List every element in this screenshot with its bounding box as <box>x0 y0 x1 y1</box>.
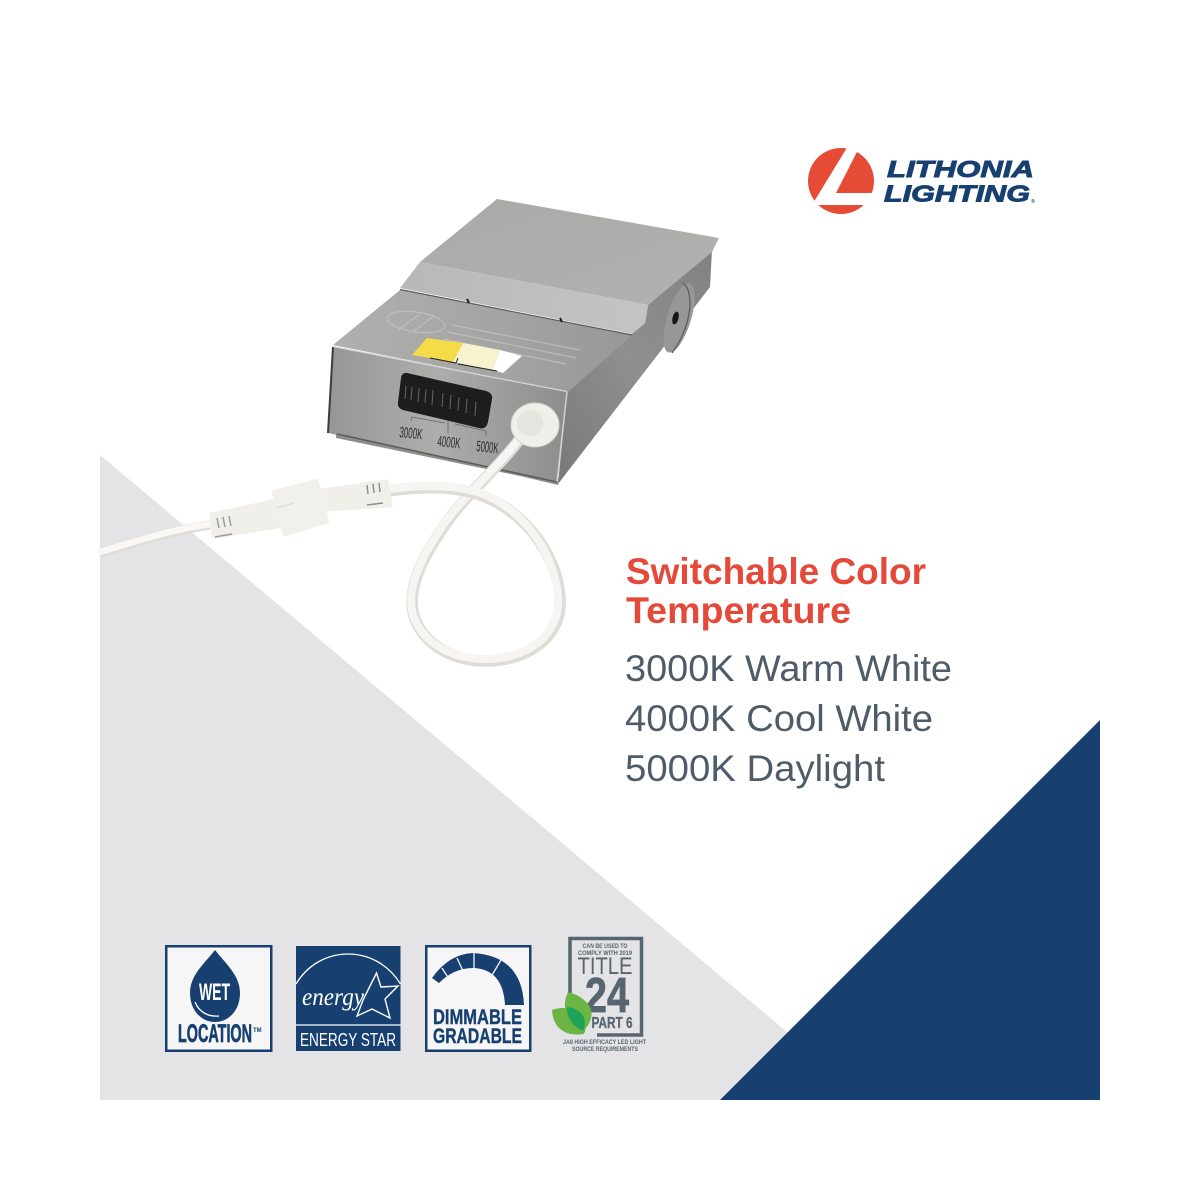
energy star outline <box>357 973 398 1018</box>
colour temperature list: 3000K Warm White <box>625 648 952 689</box>
background: light gray triangle <box>100 455 868 1100</box>
dimmer gauge icon <box>432 952 524 1005</box>
badge: title 24: TITLE <box>578 953 632 980</box>
badge: title 24: SOURCE REQUIREMENTS <box>572 1047 638 1053</box>
badge: energy star <box>296 946 400 1051</box>
switch position labels <box>399 424 499 457</box>
box bottom flange <box>336 433 560 485</box>
badge: energy star: ENERGY STAR <box>300 1030 396 1050</box>
badge: dimmable gradable: DIMMABLE <box>433 1006 522 1029</box>
logo wordmark: LIGHTING <box>884 180 1030 206</box>
lid front bevel <box>400 262 648 334</box>
badge: dimmable gradable <box>426 946 530 1051</box>
rear lid <box>420 199 719 305</box>
cable grommet <box>511 403 559 447</box>
badge: energy star: energy <box>302 984 365 1011</box>
box front face <box>328 347 567 482</box>
badge: wet location: WET <box>199 979 230 1006</box>
badge: wet location <box>166 946 271 1051</box>
colour temperature list <box>625 648 952 789</box>
logo wordmark: ® <box>1031 198 1035 205</box>
side knockout <box>657 280 701 356</box>
badge: title 24 <box>552 938 646 1053</box>
badge: dimmable gradable: GRADABLE <box>433 1025 522 1048</box>
background: navy triangle <box>720 720 1100 1100</box>
water drop icon <box>190 950 240 1022</box>
logo wordmark: LITHONIA <box>887 156 1034 182</box>
embossed logo on top <box>386 308 580 364</box>
heading: Switchable Color <box>626 551 926 592</box>
green leaves icon <box>552 992 592 1035</box>
colour temperature list: 5000K Daylight <box>625 748 886 789</box>
logo mark <box>808 146 875 214</box>
badge: title 24: PART 6 <box>592 1015 633 1032</box>
colour temperature switch <box>398 373 492 436</box>
switch position labels: 5000K <box>476 438 499 457</box>
colour temperature list: 4000K Cool White <box>625 698 933 739</box>
badge: title 24: JA8 HIGH EFFICACY LED LIGHT <box>563 1040 646 1046</box>
badge: wet location: LOCATION <box>178 1020 252 1048</box>
heading <box>626 551 926 631</box>
box top panel <box>333 290 632 392</box>
heading: Temperature <box>626 590 851 631</box>
logo wordmark <box>884 156 1035 206</box>
badge: wet location: TM <box>253 1028 262 1034</box>
badge: title 24: 24 <box>585 969 629 1023</box>
logo: Lithonia Lighting <box>808 146 1035 214</box>
badge: title 24: COMPLY WITH 2019 <box>578 951 633 957</box>
badge: title 24: CAN BE USED TO <box>582 944 628 950</box>
switch position labels: 4000K <box>437 433 461 452</box>
product label <box>412 338 522 373</box>
cable: section from grommet <box>411 431 525 661</box>
switch position labels: 3000K <box>399 424 423 443</box>
cable: left lead <box>100 524 210 553</box>
cable: loop and connector lead <box>388 486 560 661</box>
box right side <box>558 250 712 484</box>
product photo: driver box <box>328 199 719 485</box>
waterproof connector <box>212 482 390 537</box>
